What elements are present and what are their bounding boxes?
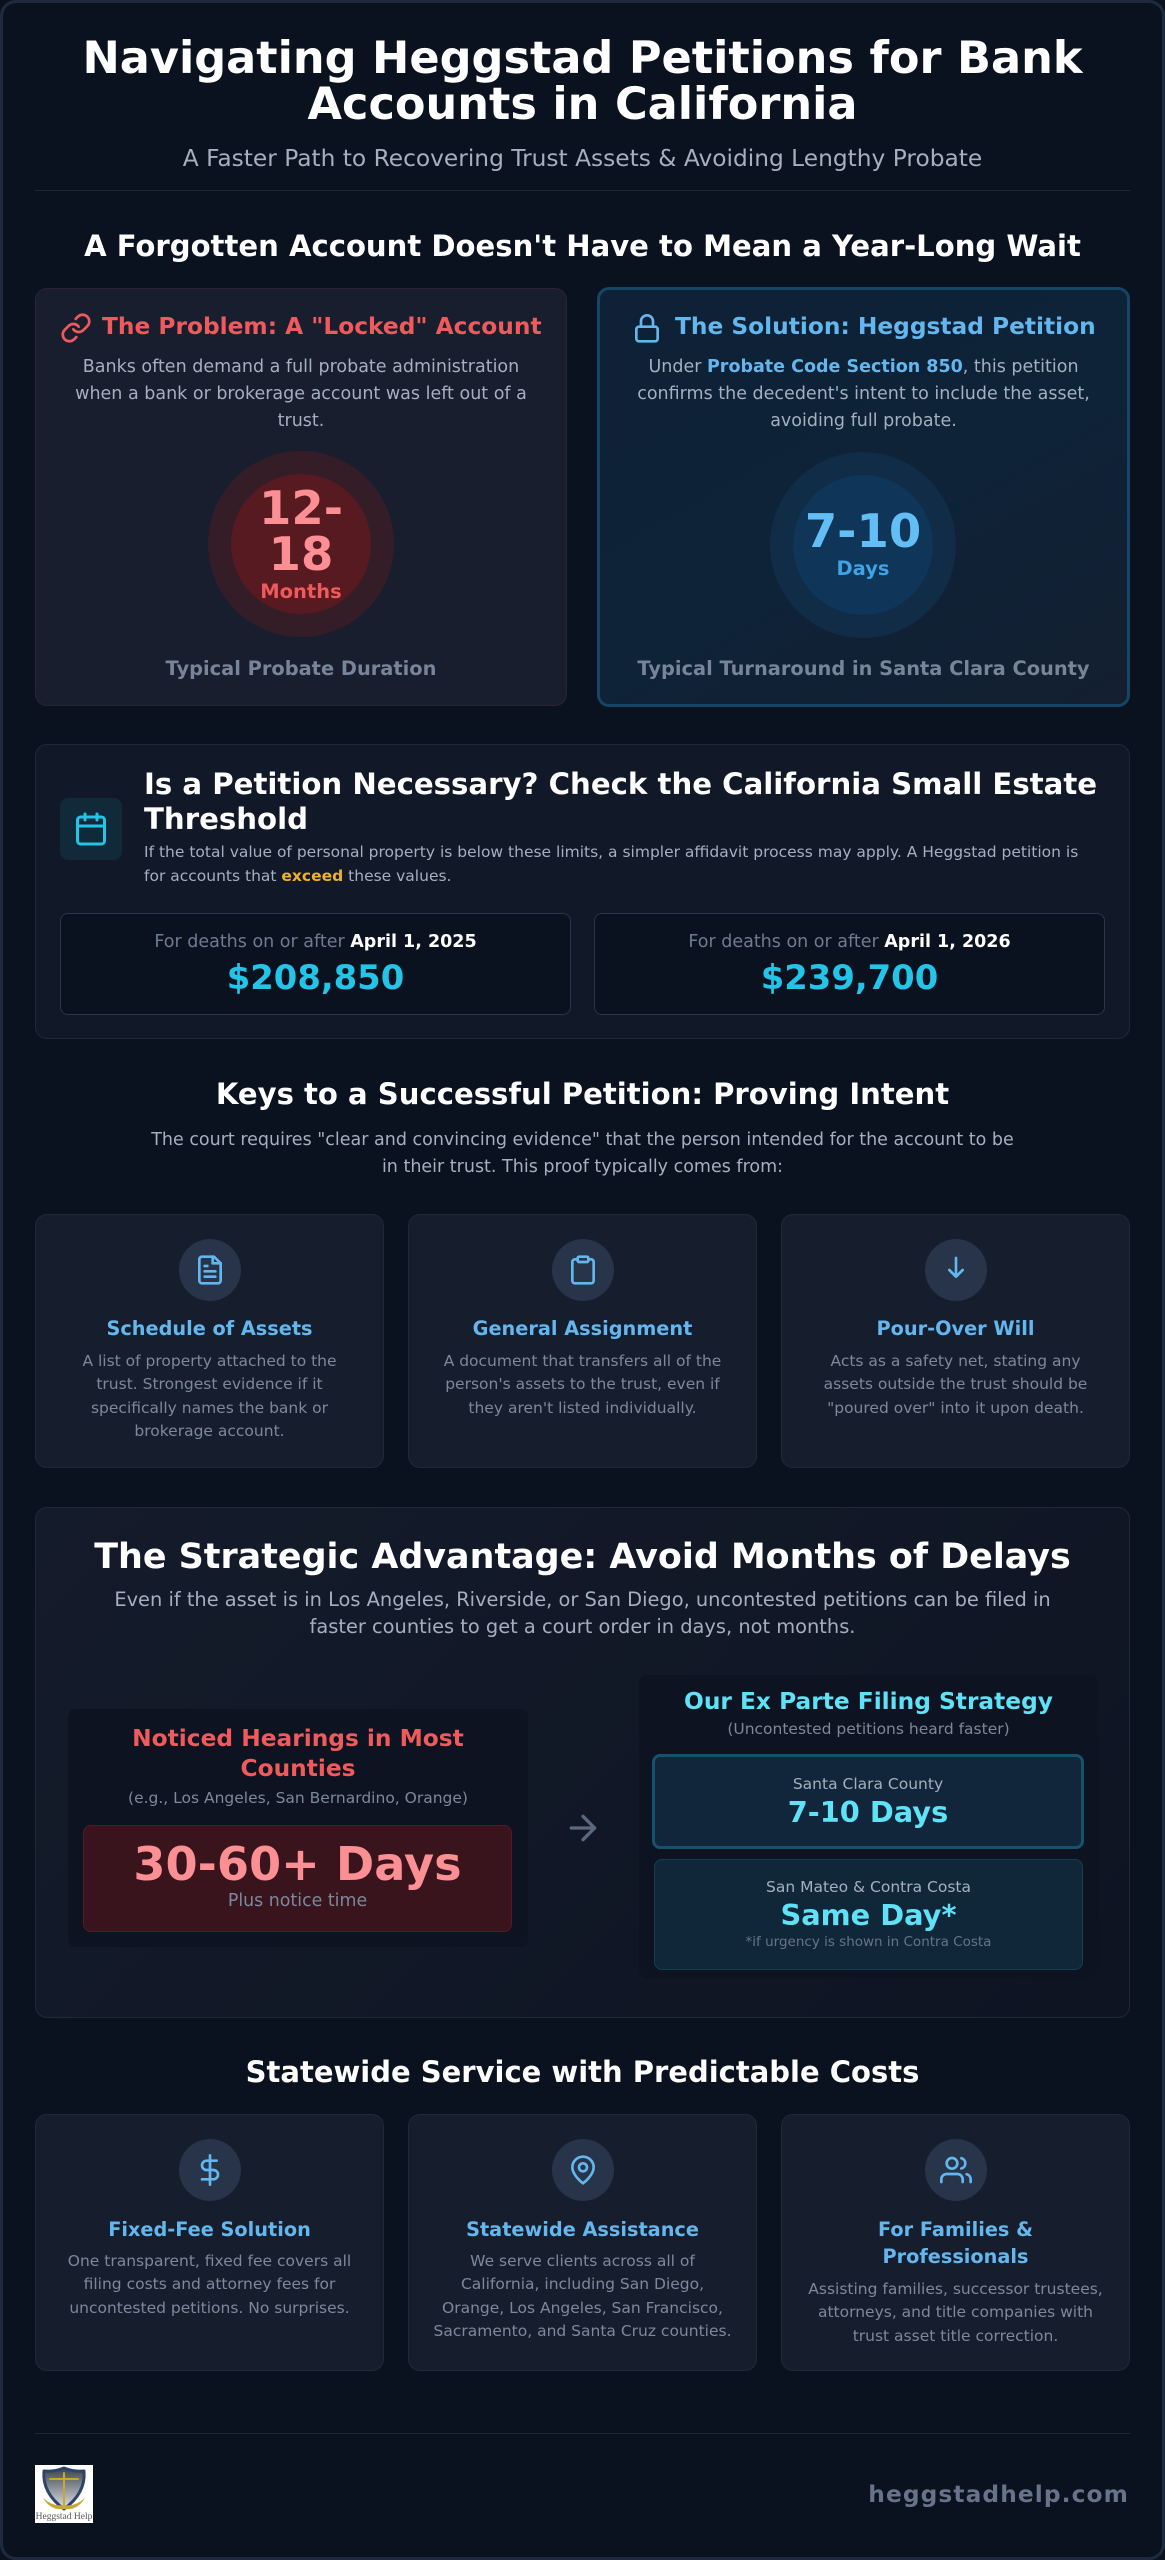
stat circle: 7-10 days: Days [836, 557, 890, 580]
stat circle: 12-18 months: Months [260, 580, 342, 603]
threshold text [144, 843, 1078, 884]
strategy heading: Our Ex Parte Filing Strategy [684, 1688, 1053, 1715]
problem heading: The Problem: A "Locked" Account [102, 313, 542, 340]
box: san mateo: San Mateo & Contra Costa [766, 1878, 971, 1896]
threshold text: If the total value of personal property is below these limits, a simpler affidavit process may apply. A Heggstad petition is [144, 843, 1078, 861]
footer [35, 2465, 1129, 2523]
stat caption: Typical Probate Duration [166, 657, 436, 680]
keys intro text [151, 1130, 1014, 1177]
icon: users [925, 2139, 987, 2201]
stat caption: Typical Turnaround in Santa Clara County [637, 657, 1090, 680]
box: san mateo: Same Day* [780, 1898, 956, 1932]
stat circle: 12-18 months: 12- [259, 481, 343, 535]
box: san mateo [654, 1859, 1083, 1970]
card title: Pour-Over Will [876, 1317, 1034, 1340]
problem text: Banks often demand a full probate administration [83, 357, 519, 377]
advantage text: faster counties to get a court order in days, not months. [310, 1615, 855, 1638]
card text: Acts as a safety net, stating any [830, 1352, 1080, 1370]
card: pour-over will [781, 1214, 1130, 1468]
website: heggstadhelp.com [868, 2481, 1129, 2508]
panel: small estate threshold [35, 744, 1130, 1039]
column: noticed hearings [68, 1709, 528, 1947]
advantage heading: The Strategic Advantage: Avoid Months of Delays [94, 1537, 1071, 1577]
card text: We serve clients across all of [470, 2252, 695, 2270]
threshold heading: Is a Petition Necessary? Check the California Small Estate [144, 767, 1097, 801]
card text: person's assets to the trust, even if [445, 1375, 720, 1393]
card text: they aren't listed individually. [468, 1399, 697, 1417]
card text [433, 2252, 732, 2340]
threshold box 2025: $208,850 [227, 958, 404, 997]
card text: Assisting families, successor trustees, [808, 2280, 1103, 2298]
panel: the solution [597, 287, 1130, 707]
threshold box 2026 [594, 913, 1105, 1015]
card: fixed-fee [35, 2114, 384, 2371]
card text: uncontested petitions. No surprises. [69, 2299, 350, 2317]
heading: statewide service: Statewide Service with Predictable Costs [246, 2055, 919, 2089]
card title: Professionals [882, 2245, 1028, 2268]
card text: specifically names the bank or [91, 1399, 328, 1417]
panel: the problem [35, 288, 567, 706]
title: Accounts in California [308, 78, 858, 130]
card title: General Assignment [473, 1317, 692, 1340]
box: santa clara [652, 1754, 1084, 1849]
threshold box 2025: For deaths on or after April 1, 2025 [154, 932, 477, 952]
logo [35, 2465, 93, 2523]
threshold box 2025 [60, 913, 571, 1015]
noticed heading [132, 1725, 464, 1782]
stat circle: 12-18 months: 18 [269, 527, 333, 581]
card title: Statewide Assistance [466, 2218, 699, 2241]
card text: A list of property attached to the [82, 1352, 337, 1370]
card text [824, 1352, 1087, 1417]
box: santa clara: Santa Clara County [793, 1775, 943, 1793]
keys intro text: The court requires "clear and convincing evidence" that the person intended for the account to be [151, 1130, 1014, 1150]
card text: filing costs and attorney fees for [84, 2275, 335, 2293]
strategy note: (Uncontested petitions heard faster) [727, 1720, 1010, 1738]
card text: A document that transfers all of the [444, 1352, 721, 1370]
solution text: avoiding full probate. [770, 411, 957, 431]
card: general assignment [408, 1214, 757, 1468]
solution heading: The Solution: Heggstad Petition [675, 313, 1096, 340]
card text: trust. Strongest evidence if it [96, 1375, 323, 1393]
header [82, 32, 1084, 172]
column: ex parte strategy [639, 1675, 1098, 1978]
card: statewide assistance [408, 2114, 757, 2371]
threshold box 2026: $239,700 [761, 958, 938, 997]
card text [808, 2280, 1103, 2345]
panel: strategic advantage [35, 1507, 1130, 2018]
solution text [637, 357, 1090, 431]
card text: trust asset title correction. [853, 2327, 1058, 2345]
card text [444, 1352, 721, 1417]
threshold heading [144, 767, 1097, 836]
red stat box [83, 1825, 512, 1932]
icon: calendar [60, 798, 122, 860]
card title: For Families & [878, 2218, 1033, 2241]
icon: lock [635, 314, 659, 343]
card text: One transparent, fixed fee covers all [68, 2252, 351, 2270]
card text: attorneys, and title companies with [818, 2303, 1093, 2321]
icon: document [179, 1239, 241, 1301]
subtitle: A Faster Path to Recovering Trust Assets & Avoiding Lengthy Probate [183, 145, 982, 172]
problem text: when a bank or brokerage account was left out of a [75, 384, 527, 404]
stat circle: 12-18 months [208, 451, 394, 637]
card text [82, 1352, 337, 1440]
card text: California, including San Diego, [461, 2275, 704, 2293]
advantage text: Even if the asset is in Los Angeles, Riverside, or San Diego, uncontested petitions can be filed in [114, 1588, 1051, 1611]
solution text: confirms the decedent's intent to include the asset, [637, 384, 1090, 404]
noticed heading: Counties [240, 1755, 356, 1782]
noticed note: (e.g., Los Angeles, San Bernardino, Orange) [128, 1789, 468, 1807]
box: san mateo: *if urgency is shown in Contra Costa [746, 1934, 991, 1950]
advantage text [114, 1588, 1051, 1638]
problem text: trust. [278, 411, 324, 431]
title [82, 32, 1084, 130]
solution text: Under Probate Code Section 850, this petition [648, 357, 1079, 377]
red stat box: Plus notice time [228, 1891, 367, 1911]
card: families and professionals [781, 2114, 1130, 2371]
card text [68, 2252, 351, 2317]
card text: assets outside the trust should be [824, 1375, 1087, 1393]
icon: clipboard [552, 1239, 614, 1301]
icon: broken link [61, 313, 91, 343]
keys intro text: in their trust. This proof typically comes from: [382, 1157, 783, 1177]
box: santa clara: 7-10 Days [788, 1795, 948, 1829]
title: Navigating Heggstad Petitions for Bank [82, 32, 1082, 84]
heading: forgotten account: A Forgotten Account Doesn't Have to Mean a Year-Long Wait [84, 229, 1081, 263]
card title: Fixed-Fee Solution [108, 2218, 311, 2241]
threshold box 2026: For deaths on or after April 1, 2026 [688, 932, 1011, 952]
card: schedule of assets [35, 1214, 384, 1468]
icon: down arrow [925, 1239, 987, 1301]
stat circle: 7-10 days [770, 452, 956, 638]
icon: map pin [552, 2139, 614, 2201]
threshold text: for accounts that exceed these values. [144, 866, 451, 884]
icon: dollar [179, 2139, 241, 2201]
problem text [75, 357, 527, 431]
stat circle: 7-10 days: 7-10 [805, 504, 921, 558]
card text: Orange, Los Angeles, San Francisco, [442, 2299, 723, 2317]
card text: Sacramento, and Santa Cruz counties. [433, 2322, 732, 2340]
card text: brokerage account. [134, 1422, 285, 1440]
card text: "poured over" into it upon death. [827, 1399, 1084, 1417]
card title [878, 2218, 1033, 2268]
heading: keys to success: Keys to a Successful Petition: Proving Intent [216, 1077, 949, 1111]
threshold heading: Threshold [144, 802, 308, 836]
logo: Heggstad Help [36, 2512, 92, 2522]
card title: Schedule of Assets [106, 1317, 313, 1340]
arrow [570, 1814, 596, 1842]
red stat box: 30-60+ Days [133, 1837, 462, 1891]
noticed heading: Noticed Hearings in Most [132, 1725, 464, 1752]
